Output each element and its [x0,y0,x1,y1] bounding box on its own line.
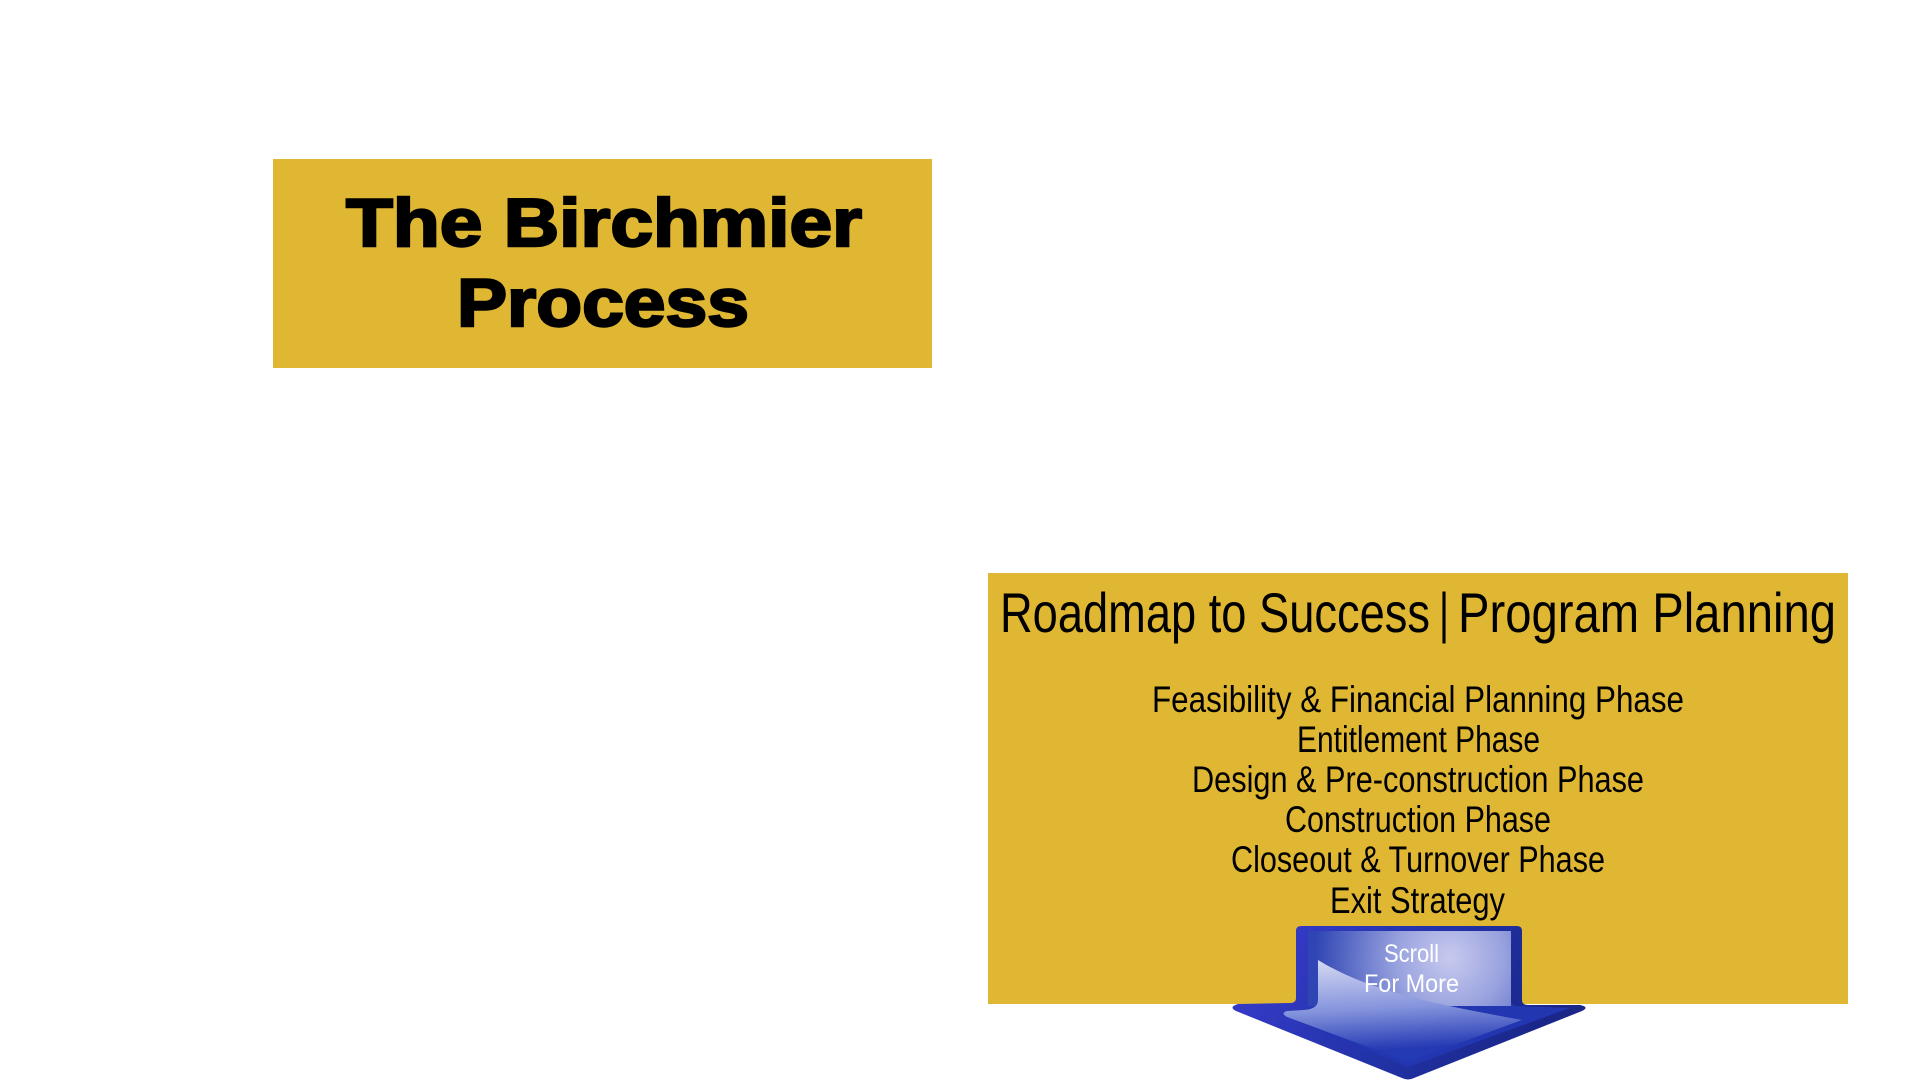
icon: scroll down arrow [1232,926,1586,1080]
title heading: The Birchmier [346,185,862,261]
phase list: Construction Phase [1285,799,1551,840]
roadmap heading: Roadmap to Success [1000,581,1430,644]
arrow label: For More [1364,970,1459,998]
arrow label [1364,940,1459,998]
title heading: Process [457,265,749,341]
title heading [346,185,862,341]
phase list [1152,679,1684,921]
panel: roadmap to success [988,573,1848,1004]
title panel [273,159,932,368]
phase list: Design & Pre-construction Phase [1192,759,1644,800]
roadmap heading [1000,581,1836,644]
arrow gloss highlight [1284,960,1522,1062]
phase list: Feasibility & Financial Planning Phase [1152,679,1684,720]
phase list: Exit Strategy [1330,880,1505,921]
phase list: Closeout & Turnover Phase [1231,839,1605,880]
roadmap heading: Program Planning [1458,581,1836,644]
phase list: Entitlement Phase [1297,719,1540,760]
arrow label: Scroll [1384,940,1439,968]
roadmap heading: | [1439,581,1449,644]
